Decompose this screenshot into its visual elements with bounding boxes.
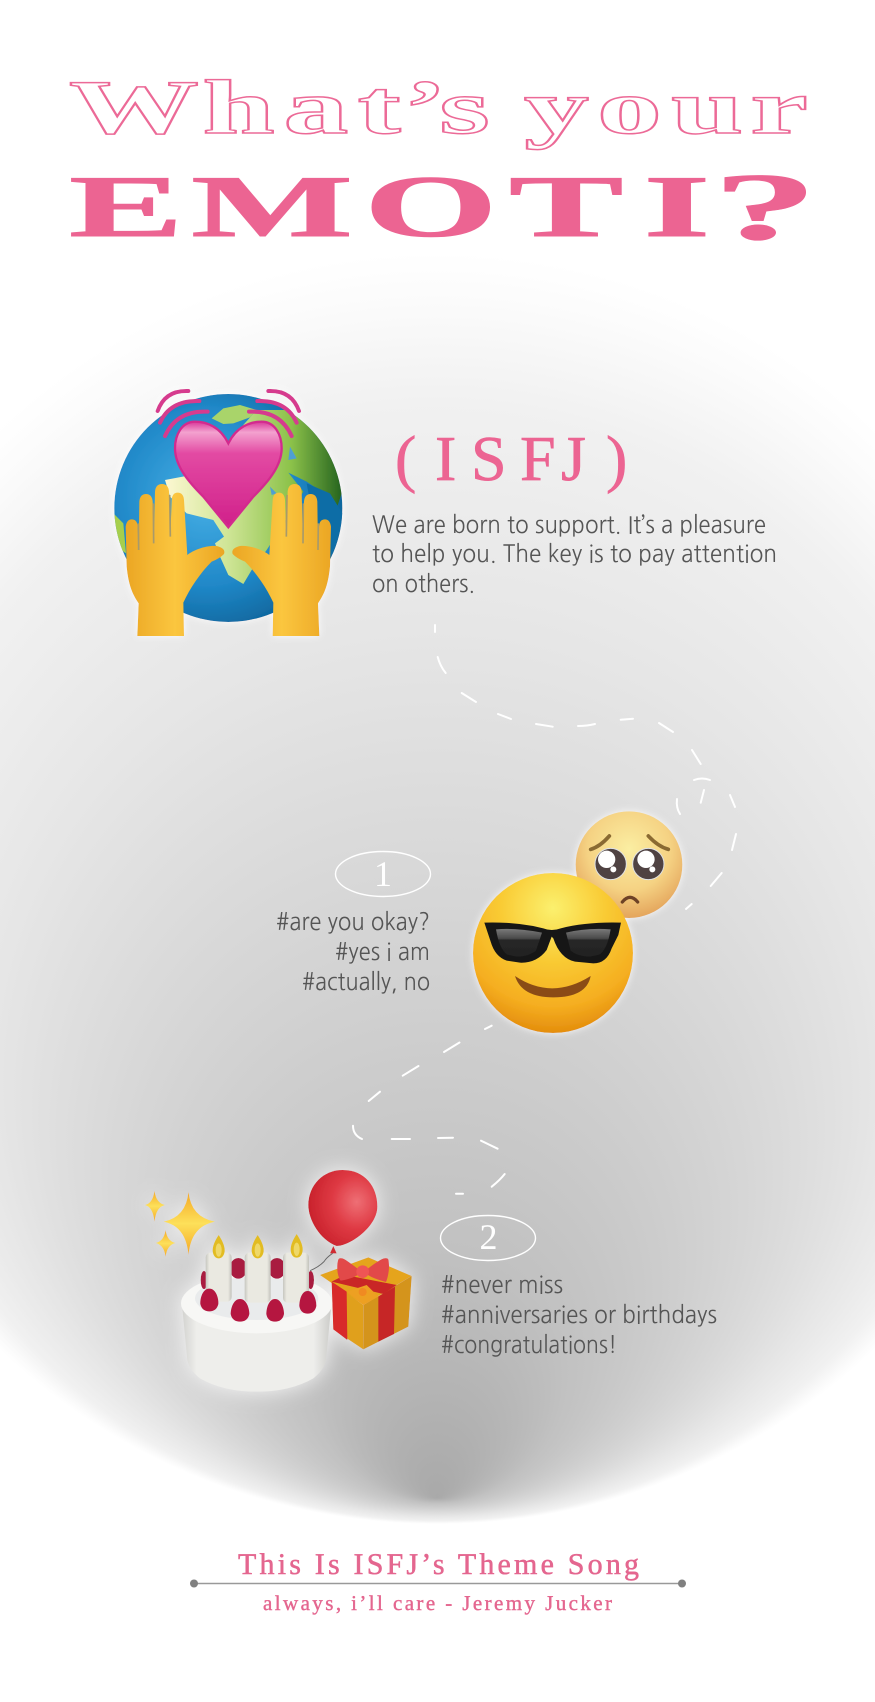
- text block: hashtags 1: #actually, no: [302, 970, 430, 994]
- badge: number 1: 1: [374, 854, 392, 894]
- left hand: [126, 484, 224, 636]
- icon: gift box: [320, 1257, 412, 1349]
- icon: smiling face with sunglasses: [473, 873, 633, 1033]
- title: [69, 64, 818, 260]
- text block: hashtags 2: #never miss: [441, 1273, 563, 1297]
- globe: [110, 394, 347, 622]
- badge: number 1: [336, 852, 430, 896]
- text block: hashtags 1: #yes i am: [335, 940, 430, 964]
- footer divider with end dots: [190, 1580, 686, 1588]
- text block: ISFJ description: to help you. The key is to pay attention: [372, 542, 777, 566]
- icon: globe with heart and raised hands: [110, 391, 347, 636]
- heading: (ISFJ): (ISFJ): [395, 423, 627, 494]
- text block: ISFJ description: [372, 513, 777, 596]
- title line: What's your: What’s your: [69, 64, 808, 150]
- text block: hashtags 1: #are you okay?: [276, 910, 430, 934]
- icon: faces: [473, 811, 682, 1033]
- icon: balloon: [308, 1170, 377, 1271]
- text block: hashtags 1: [276, 910, 430, 994]
- dashed path connecting sections: [353, 625, 736, 1194]
- footer: theme song: [190, 1548, 686, 1615]
- text block: hashtags 2: #anniversaries or birthdays: [441, 1303, 717, 1327]
- title line: EMOTI?: ?: [712, 153, 818, 260]
- icon: cake: [181, 1234, 332, 1392]
- text block: ISFJ description: on others.: [372, 572, 475, 596]
- title line: EMOTI?: EMOTI: [69, 159, 710, 256]
- icon: birthday cake, balloon, gift and sparkles: [145, 1170, 412, 1392]
- text block: hashtags 2: [441, 1273, 717, 1357]
- footer song credit: always, i’ll care - Jeremy Jucker: [263, 1591, 612, 1615]
- footer heading: This Is ISFJ’s Theme Song: [238, 1548, 639, 1581]
- icon: sparkles: [145, 1191, 215, 1257]
- right hand: [232, 484, 331, 636]
- text block: hashtags 2: #congratulations!: [441, 1333, 617, 1357]
- badge: number 2: [440, 1216, 536, 1260]
- icon: pleading face: [576, 811, 682, 918]
- badge: number 2: 2: [480, 1217, 498, 1257]
- text block: ISFJ description: We are born to support. It’s a pleasure: [372, 513, 766, 537]
- heart: [175, 422, 282, 527]
- vibration arcs: [158, 391, 299, 436]
